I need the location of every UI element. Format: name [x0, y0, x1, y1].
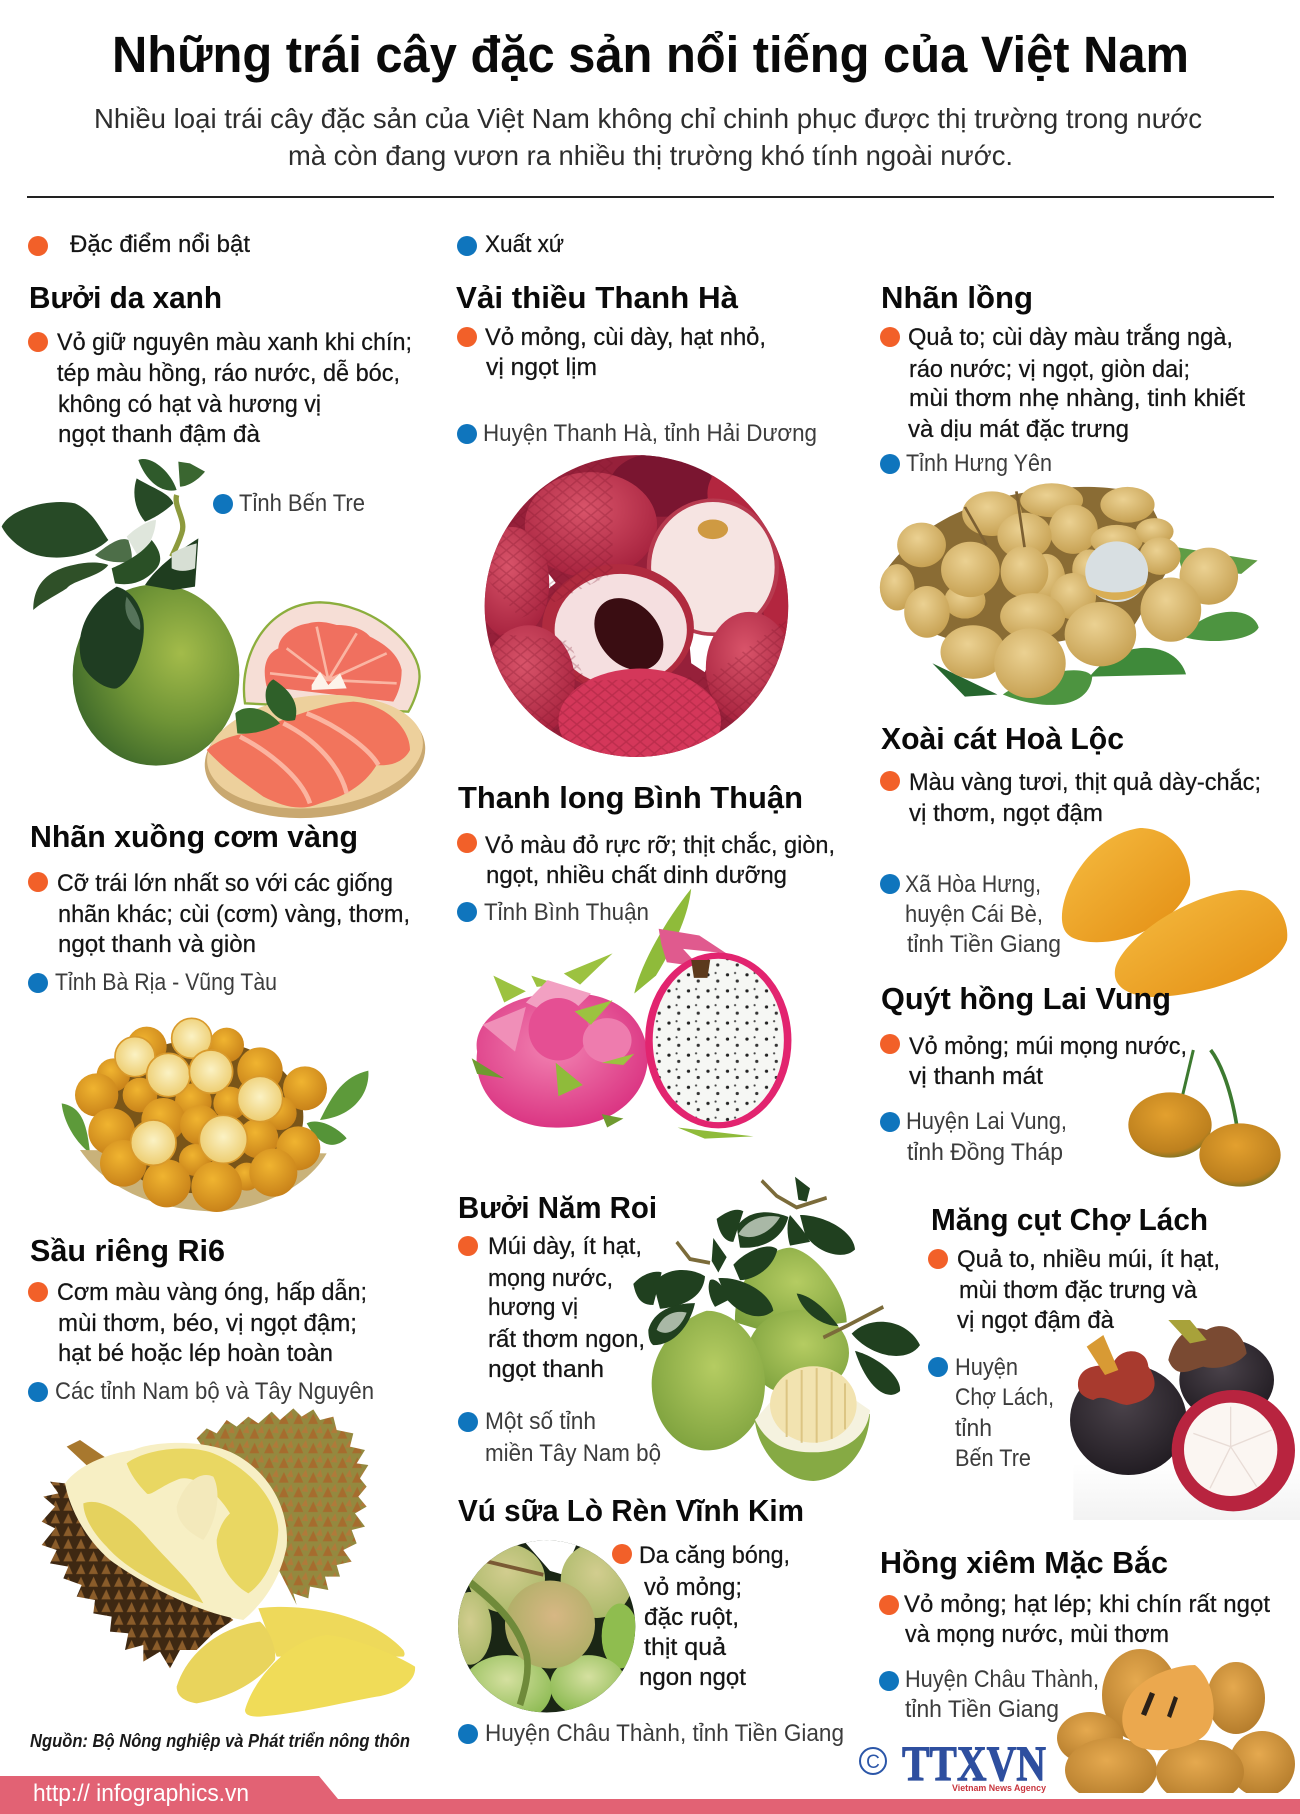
- heading: Vải thiều Thanh Hà: [456, 280, 739, 315]
- logo: TTXVN: [860, 1735, 1046, 1793]
- description: ngọt thanh: [488, 1356, 604, 1383]
- description: [458, 1233, 645, 1383]
- panel: Bưởi Năm Roi: [458, 1177, 920, 1481]
- description: [880, 324, 1245, 443]
- icon: mango: [1062, 828, 1287, 997]
- origin: [458, 1408, 661, 1467]
- description: Vỏ giữ nguyên màu xanh khi chín;: [57, 329, 412, 356]
- description: [928, 1246, 1220, 1334]
- origin: Huyện Châu Thành,: [905, 1666, 1099, 1693]
- description: Quả to, nhiều múi, ít hạt,: [957, 1246, 1220, 1273]
- origin: Tỉnh Bến Tre: [239, 490, 365, 517]
- description: [28, 329, 412, 448]
- description: ráo nước; vị ngọt, giòn dai;: [909, 356, 1190, 383]
- description: không có hạt và hương vị: [58, 391, 321, 418]
- icon: pomelo: [2, 459, 431, 829]
- subtitle: mà còn đang vươn ra nhiều thị trường khó tính ngoài nước.: [288, 140, 1013, 171]
- description: Màu vàng tươi, thịt quả dày-chắc;: [909, 769, 1261, 796]
- origin: Bến Tre: [955, 1445, 1031, 1472]
- description: và mọng nước, mùi thơm: [905, 1621, 1169, 1648]
- origin: [880, 1108, 1067, 1166]
- heading: Xoài cát Hoà Lộc: [881, 721, 1124, 756]
- description: vỏ mỏng;: [644, 1574, 742, 1601]
- origin: [928, 1354, 1054, 1472]
- icon: lychee: [484, 455, 788, 757]
- panel: Măng cụt Chợ Lách: [928, 1202, 1300, 1520]
- subtitle: [94, 103, 1202, 171]
- origin: Huyện Châu Thành, tỉnh Tiền Giang: [485, 1720, 844, 1747]
- description: ngọt thanh đậm đà: [58, 421, 261, 448]
- description: vị ngọt đậm đà: [957, 1307, 1115, 1334]
- panel: Nhãn xuồng cơm vàng: [28, 819, 410, 1212]
- origin: tỉnh: [955, 1415, 992, 1442]
- heading: Măng cụt Chợ Lách: [931, 1202, 1208, 1237]
- description: ngọt thanh và giòn: [58, 931, 256, 958]
- origin: miền Tây Nam bộ: [485, 1440, 661, 1467]
- icon: tangerine: [1128, 1050, 1281, 1187]
- icon: longan cluster: [880, 483, 1259, 705]
- origin: tỉnh Đồng Tháp: [907, 1139, 1063, 1166]
- panel: Xoài cát Hoà Lộc: [880, 721, 1287, 997]
- origin: Một số tỉnh: [485, 1408, 596, 1435]
- description: rất thơm ngon,: [488, 1326, 645, 1353]
- source note: Nguồn: Bộ Nông nghiệp và Phát triển nông thôn: [30, 1731, 410, 1751]
- panel: Hồng xiêm Mặc Bắc: [879, 1544, 1295, 1804]
- origin: Chợ Lách,: [955, 1384, 1054, 1411]
- description: [612, 1542, 790, 1691]
- icon: mangosteen: [1070, 1320, 1300, 1520]
- legend: [28, 231, 564, 258]
- description: Vỏ mỏng; múi mọng nước,: [909, 1033, 1187, 1060]
- logo: TTXVN: TTXVN: [902, 1735, 1046, 1791]
- description: [457, 324, 766, 381]
- heading: Bưởi da xanh: [29, 280, 222, 315]
- description: [28, 870, 410, 958]
- description: Cỡ trái lớn nhất so với các giống: [57, 870, 393, 897]
- panel: Sầu riêng Ri6: [28, 1233, 415, 1717]
- origin: Tỉnh Bình Thuận: [484, 899, 649, 926]
- description: hương vị: [488, 1294, 578, 1321]
- description: ngọt, nhiều chất dinh dưỡng: [486, 862, 787, 889]
- description: Vỏ mỏng; hạt lép; khi chín rất ngọt: [904, 1591, 1270, 1618]
- description: Quả to; cùi dày màu trắng ngà,: [908, 324, 1233, 351]
- footer url: http:// infographics.vn: [33, 1780, 249, 1807]
- description: mùi thơm nhẹ nhàng, tinh khiết: [909, 385, 1245, 412]
- panel: Quýt hồng Lai Vung: [880, 981, 1281, 1187]
- icon: dragon fruit: [472, 889, 788, 1139]
- description: ngon ngọt: [639, 1664, 746, 1691]
- description: [457, 832, 835, 889]
- title: Những trái cây đặc sản nổi tiếng của Việt Nam: [112, 26, 1189, 83]
- legend: Xuất xứ: [485, 231, 564, 258]
- origin: Huyện Thanh Hà, tỉnh Hải Dương: [483, 420, 817, 447]
- icon: star apple: [458, 1540, 636, 1712]
- heading: Vú sữa Lò Rèn Vĩnh Kim: [458, 1493, 804, 1528]
- description: Vỏ màu đỏ rực rỡ; thịt chắc, giòn,: [485, 832, 835, 859]
- icon: longan bowl: [62, 1018, 368, 1212]
- origin: Tỉnh Hưng Yên: [906, 450, 1052, 477]
- heading: Nhãn xuồng cơm vàng: [30, 819, 358, 854]
- legend: Đặc điểm nổi bật: [70, 231, 250, 258]
- icon: nam roi pomelo: [633, 1177, 920, 1481]
- description: [879, 1591, 1270, 1648]
- description: mùi thơm, béo, vị ngọt đậm;: [58, 1310, 357, 1337]
- description: vị thơm, ngọt đậm: [909, 800, 1103, 827]
- icon: sapodilla: [1057, 1649, 1295, 1804]
- description: và dịu mát đặc trưng: [908, 416, 1129, 443]
- origin: Xã Hòa Hưng,: [905, 871, 1041, 898]
- description: Da căng bóng,: [639, 1542, 790, 1569]
- description: vị ngọt lịm: [486, 354, 597, 381]
- description: nhãn khác; cùi (cơm) vàng, thơm,: [58, 901, 410, 928]
- heading: Thanh long Bình Thuận: [458, 780, 803, 815]
- description: vị thanh mát: [909, 1063, 1043, 1090]
- description: [880, 769, 1261, 827]
- heading: Nhãn lồng: [881, 280, 1033, 315]
- description: [28, 1279, 367, 1367]
- panel: Vú sữa Lò Rèn Vĩnh Kim: [448, 1493, 844, 1747]
- description: đặc ruột,: [644, 1604, 739, 1631]
- description: Múi dày, ít hạt,: [488, 1233, 642, 1260]
- description: hạt bé hoặc lép hoàn toàn: [58, 1340, 333, 1367]
- icon: durian: [42, 1408, 415, 1717]
- origin: Huyện Lai Vung,: [906, 1108, 1067, 1135]
- origin: Tỉnh Bà Rịa - Vũng Tàu: [55, 969, 277, 996]
- heading: Bưởi Năm Roi: [458, 1190, 657, 1225]
- logo: TTXVN: Vietnam News Agency: [952, 1783, 1046, 1793]
- description: tép màu hồng, ráo nước, dễ bóc,: [57, 360, 400, 387]
- origin: [880, 871, 1061, 958]
- description: Cơm màu vàng óng, hấp dẫn;: [57, 1279, 367, 1306]
- description: mùi thơm đặc trưng và: [959, 1277, 1198, 1304]
- subtitle: Nhiều loại trái cây đặc sản của Việt Nam không chỉ chinh phục được thị trường trong nước: [94, 103, 1202, 134]
- origin: Huyện: [955, 1354, 1018, 1381]
- origin: Các tỉnh Nam bộ và Tây Nguyên: [55, 1378, 374, 1405]
- description: Vỏ mỏng, cùi dày, hạt nhỏ,: [485, 324, 766, 351]
- heading: Sầu riêng Ri6: [30, 1233, 225, 1268]
- origin: tỉnh Tiền Giang: [905, 1696, 1059, 1723]
- description: thịt quả: [644, 1634, 727, 1661]
- origin: tỉnh Tiền Giang: [907, 931, 1061, 958]
- origin: huyện Cái Bè,: [905, 901, 1043, 928]
- panel: Thanh long Bình Thuận: [457, 780, 835, 1139]
- origin: [879, 1666, 1099, 1723]
- panel: Bưởi da xanh: [2, 280, 431, 829]
- description: [880, 1033, 1187, 1090]
- heading: Hồng xiêm Mặc Bắc: [880, 1544, 1168, 1580]
- logo: TTXVN: C: [866, 1752, 880, 1773]
- heading: Quýt hồng Lai Vung: [881, 981, 1171, 1016]
- footer bar: [0, 1776, 1300, 1814]
- panel: Nhãn lồng: [880, 280, 1259, 705]
- panel: Vải thiều Thanh Hà: [456, 280, 817, 774]
- description: mọng nước,: [488, 1265, 613, 1292]
